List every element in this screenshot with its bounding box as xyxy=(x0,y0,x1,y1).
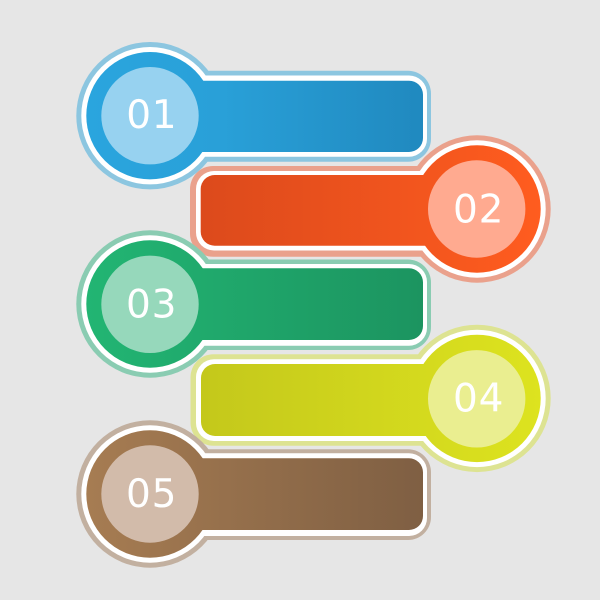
banner 05: brown xyxy=(76,420,431,568)
badge 05: 05 xyxy=(126,472,177,517)
badge 01 xyxy=(101,67,199,164)
banner 04: yellow-green xyxy=(190,325,551,472)
badge 05 xyxy=(101,445,199,543)
banner 01: blue xyxy=(76,42,431,189)
badge 02: 02 xyxy=(453,188,504,232)
badge 01: 01 xyxy=(126,93,177,138)
badge 04 xyxy=(428,350,525,447)
banner 02: orange xyxy=(190,135,551,283)
badge 04: 04 xyxy=(453,376,504,422)
badge 03: 03 xyxy=(126,282,177,328)
badge 02 xyxy=(428,160,525,258)
banner 03: green xyxy=(76,230,431,378)
badge 03 xyxy=(101,256,199,353)
